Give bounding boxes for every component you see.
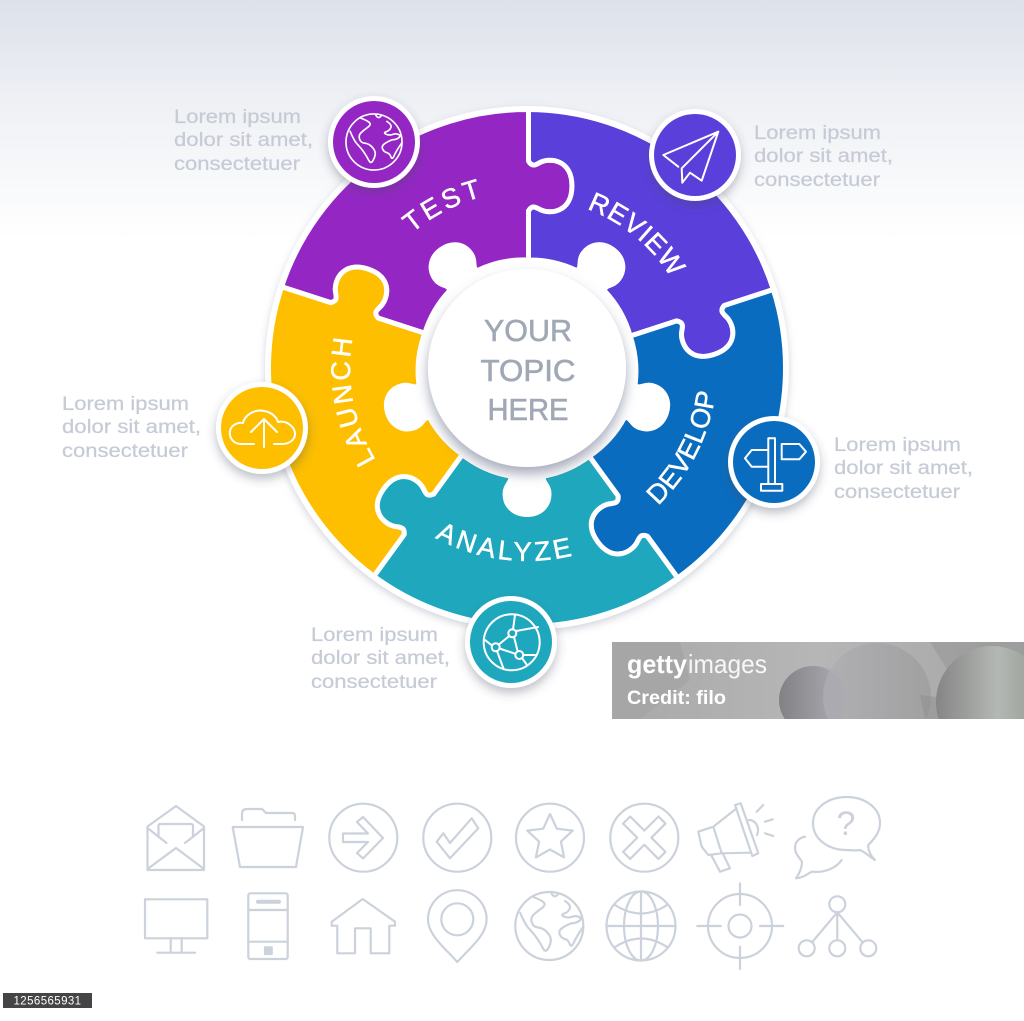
icon: envelope <box>148 806 204 870</box>
badge: analyze network globe <box>465 596 557 688</box>
icon: speech bubbles: ? <box>837 805 855 843</box>
icon: speech bubbles <box>795 797 880 878</box>
text block: analyze: consectetuer <box>311 672 438 693</box>
icon: folder <box>233 809 303 867</box>
icon: x circle <box>609 802 680 873</box>
icon set <box>145 797 880 969</box>
text block: review: Lorem ipsum <box>754 123 881 144</box>
puzzle piece: launch <box>205 245 508 591</box>
label: test: TEST <box>400 178 477 230</box>
icon: house <box>332 899 395 953</box>
label: review: REVIEW <box>588 192 687 274</box>
background gradient <box>0 0 1024 240</box>
text block: launch: consectetuer <box>62 441 189 462</box>
ring backing disc <box>265 106 789 630</box>
center hub text: HERE <box>488 392 568 427</box>
text block: analyze: Lorem ipsum <box>311 625 438 646</box>
label: analyze: ANALYZE <box>434 524 572 562</box>
icon: star circle <box>516 804 584 872</box>
center hub text: YOUR <box>484 313 572 348</box>
watermark banner <box>612 642 1024 719</box>
text block: develop: dolor sit amet, <box>834 458 973 479</box>
text block: review <box>754 123 893 191</box>
text block: develop: Lorem ipsum <box>834 435 961 456</box>
image id tag: 1256565931 <box>14 996 81 1008</box>
text block: test: consectetuer <box>174 154 301 175</box>
center hub disc <box>428 269 626 467</box>
icon: check circle <box>423 804 491 872</box>
icon: wireframe globe <box>606 892 676 960</box>
icon: target <box>697 883 783 969</box>
icon: smartphone <box>248 893 288 959</box>
text block: develop: consectetuer <box>834 482 961 503</box>
watermark banner: getty <box>627 649 688 679</box>
text block: test: Lorem ipsum <box>174 107 301 128</box>
text block: launch <box>62 394 201 462</box>
icon: megaphone <box>698 803 773 872</box>
text block: analyze: dolor sit amet, <box>311 648 450 669</box>
text block: analyze <box>311 625 450 693</box>
icon: earth <box>515 892 583 960</box>
center hub text <box>480 313 576 427</box>
text block: test <box>174 107 313 175</box>
text block: test: dolor sit amet, <box>174 130 313 151</box>
watermark banner: Credit: filo <box>627 687 726 709</box>
text block: develop <box>834 435 973 503</box>
image id tag <box>3 993 92 1008</box>
text block: launch: dolor sit amet, <box>62 417 201 438</box>
text block: launch: Lorem ipsum <box>62 394 189 415</box>
icon: arrow circle <box>329 804 397 872</box>
label: launch: LAUNCH <box>330 338 375 468</box>
badge: develop signpost <box>728 416 820 508</box>
puzzle piece: test <box>282 109 572 333</box>
icon: hierarchy <box>799 896 876 956</box>
puzzle ring diagram <box>262 106 792 634</box>
badge: test globe <box>328 96 420 188</box>
text block: review: dolor sit amet, <box>754 146 893 167</box>
badge: review paper plane <box>649 109 741 201</box>
badge: launch cloud upload <box>216 382 308 474</box>
center hub text: TOPIC <box>480 353 576 388</box>
icon: monitor <box>145 899 207 953</box>
watermark banner: images <box>688 649 767 679</box>
puzzle piece: review <box>484 55 787 400</box>
puzzle piece: develop <box>511 252 877 604</box>
label: develop: DEVELOP <box>646 391 714 505</box>
puzzle piece: analyze <box>339 370 705 721</box>
text block: review: consectetuer <box>754 170 881 191</box>
icon: location pin <box>428 890 487 962</box>
